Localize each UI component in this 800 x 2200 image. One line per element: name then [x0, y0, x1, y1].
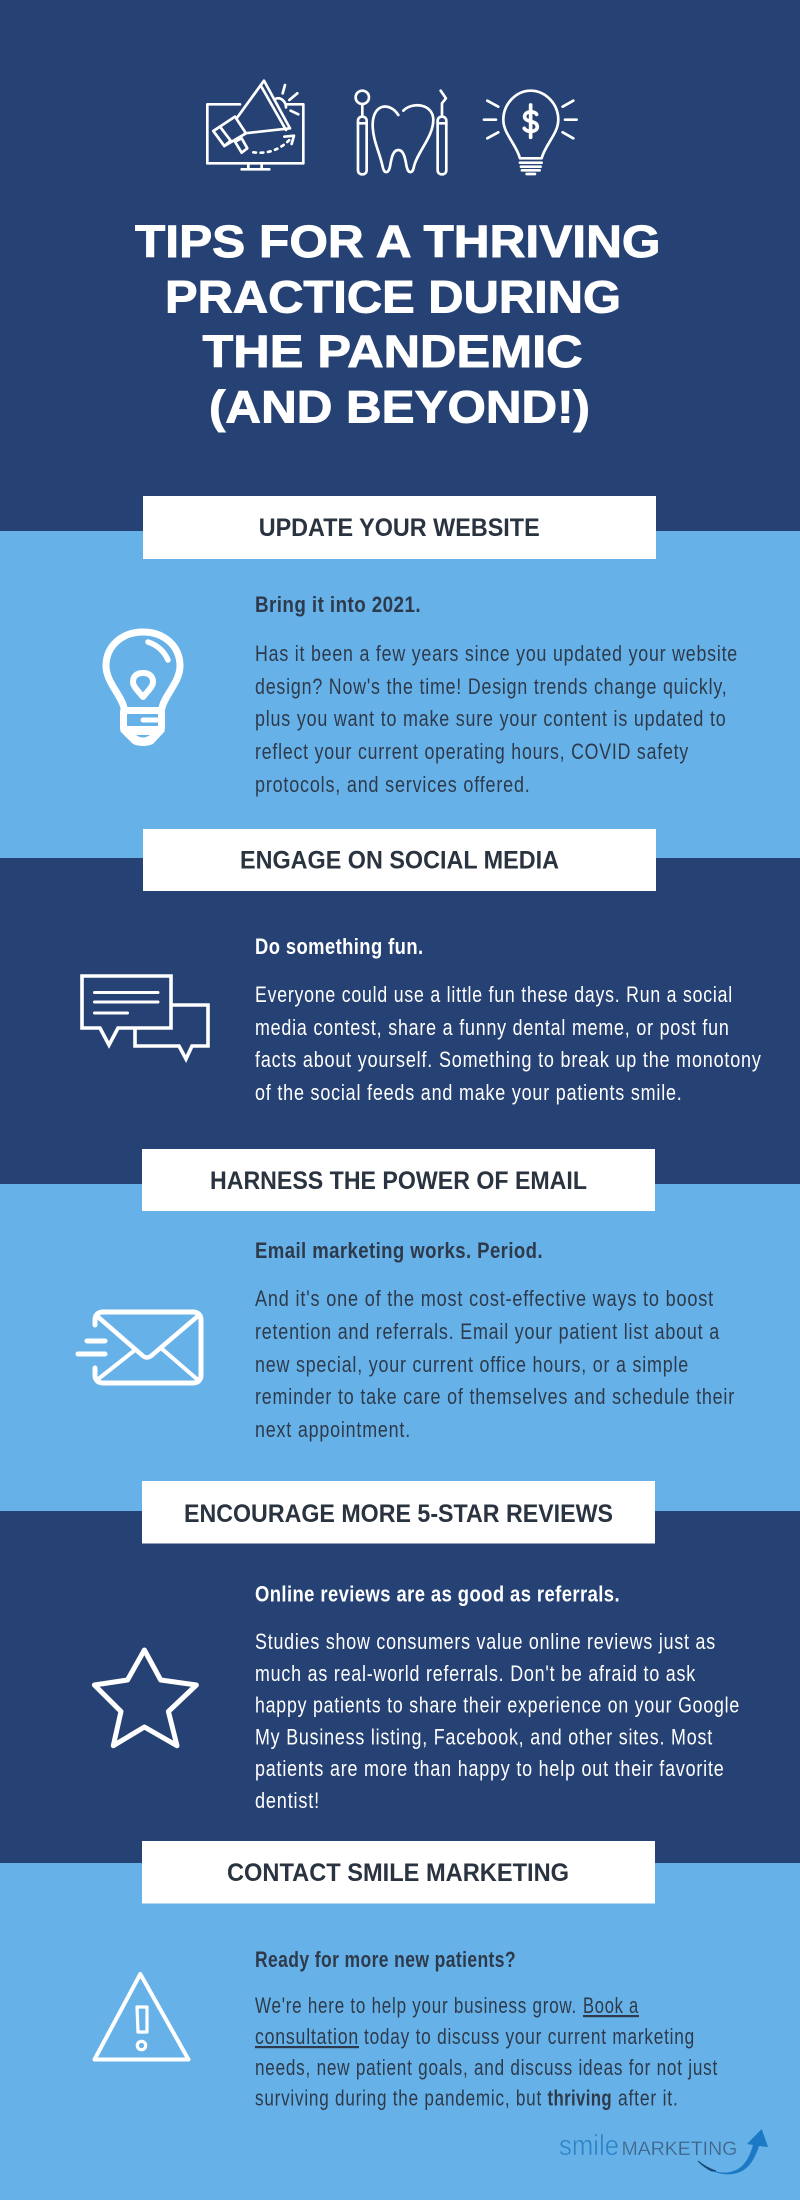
section heading: update your website — [143, 496, 656, 559]
logo: smile marketing — [559, 2129, 768, 2174]
title: (AND BEYOND!) — [209, 382, 590, 432]
text block: contact smile marketing: thriving — [548, 2086, 612, 2110]
text block: contact smile marketing: Book a — [583, 1993, 639, 2018]
logo: smile marketing: MARKETING — [622, 2138, 737, 2160]
title: TIPS FOR A THRIVING — [135, 216, 660, 267]
section heading: contact smile marketing: CONTACT SMILE MARKETING — [227, 1859, 569, 1887]
text block: contact smile marketing: We're here to help your business grow. — [255, 1993, 577, 2018]
text block: engage on social media: Do something fun. — [255, 934, 424, 959]
text block: encourage more 5-star reviews: dentist! — [255, 1788, 320, 1813]
section heading: engage on social media: ENGAGE ON SOCIAL MEDIA — [240, 846, 559, 874]
icon: star — [94, 1650, 196, 1746]
text block: harness the power of email: new special, your current office hours, or a simple — [255, 1352, 689, 1377]
logo: smile marketing: smile — [559, 2130, 619, 2162]
section heading: encourage more 5-star reviews — [142, 1481, 655, 1544]
icon: warning triangle — [94, 1974, 188, 2060]
section heading: harness the power of email: HARNESS THE POWER OF EMAIL — [210, 1167, 587, 1195]
icon: chat bubbles — [82, 976, 208, 1059]
panel: header — [0, 0, 800, 531]
text block: contact smile marketing: today to discuss your current marketing — [364, 2024, 695, 2049]
panel: update your website — [0, 496, 800, 858]
text block: harness the power of email: next appointment. — [255, 1417, 411, 1442]
panel: contact smile marketing — [0, 1841, 800, 2200]
title — [135, 216, 660, 432]
text block: update your website: Bring it into 2021. — [255, 592, 421, 617]
text block: engage on social media: of the social feeds and make your patients smile. — [255, 1080, 683, 1105]
text block: encourage more 5-star reviews — [255, 1582, 740, 1813]
panel: engage on social media — [0, 829, 800, 1184]
section heading: encourage more 5-star reviews: ENCOURAGE MORE 5-STAR REVIEWS — [184, 1500, 613, 1528]
text block: engage on social media — [255, 934, 762, 1105]
text block: encourage more 5-star reviews: much as real-world referrals. Don't be afraid to ask — [255, 1661, 696, 1686]
text block: harness the power of email: Email marketing works. Period. — [255, 1238, 543, 1263]
panel: harness the power of email — [0, 1149, 800, 1511]
icon: sending envelope — [78, 1312, 201, 1383]
section heading: engage on social media — [143, 829, 656, 891]
section heading: harness the power of email — [142, 1149, 655, 1211]
icon: megaphone on monitor — [207, 81, 303, 169]
icon: light bulb with dollar sign — [484, 91, 577, 174]
text block: update your website: protocols, and services offered. — [255, 772, 531, 797]
title: THE PANDEMIC — [202, 326, 582, 377]
text block: harness the power of email: And it's one of the most cost-effective ways to boost — [255, 1286, 714, 1311]
text block: contact smile marketing — [255, 1947, 718, 2110]
text block: encourage more 5-star reviews: Online reviews are as good as referrals. — [255, 1582, 620, 1606]
text block: update your website — [255, 592, 738, 797]
text block: harness the power of email — [255, 1238, 735, 1442]
text block: contact smile marketing: surviving during the pandemic, but — [255, 2086, 542, 2110]
text block: update your website: reflect your current operating hours, COVID safety — [255, 739, 689, 764]
text block: contact smile marketing: after it. — [618, 2086, 679, 2110]
section heading: contact smile marketing — [142, 1841, 655, 1904]
section heading: update your website: UPDATE YOUR WEBSITE — [259, 514, 540, 542]
text block: contact smile marketing: Ready for more new patients? — [255, 1947, 516, 1972]
text block: contact smile marketing: consultation — [255, 2024, 359, 2049]
title: PRACTICE DURING — [165, 272, 621, 322]
icon: tooth and dental tools — [356, 91, 446, 174]
panel: encourage more 5-star reviews — [0, 1481, 800, 1863]
icon: light bulb — [106, 632, 180, 746]
